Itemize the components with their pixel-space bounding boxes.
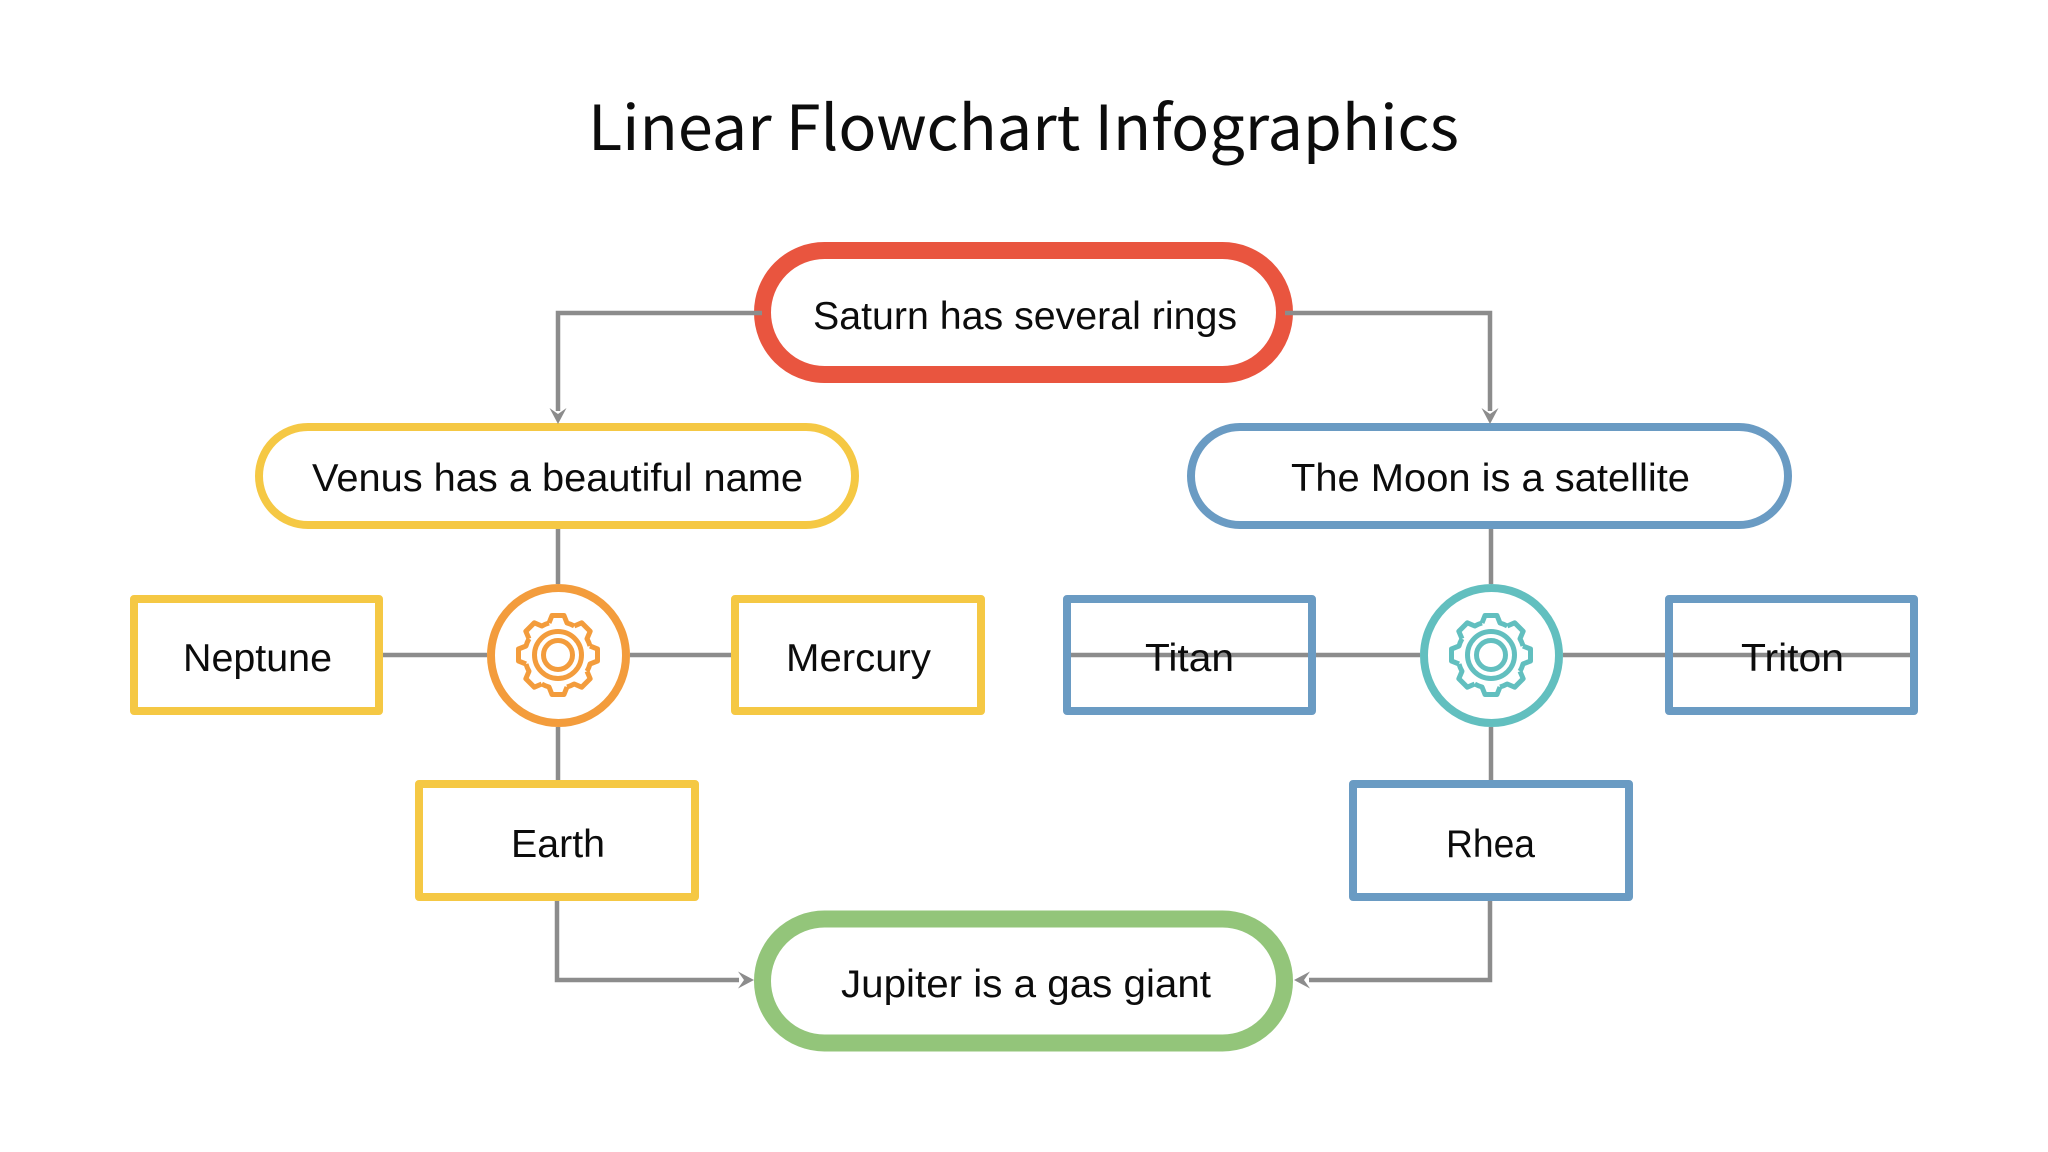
node: Triton box: [1669, 599, 1914, 711]
arrow: Rhea to Jupiter: [1294, 901, 1490, 988]
node: Saturn (top pill): Saturn has several rings: [813, 295, 1237, 338]
node: Earth box: [419, 784, 695, 897]
node: Titan box: Titan: [1145, 637, 1234, 680]
node: Neptune box: [134, 599, 379, 711]
node: Saturn (top pill): [762, 250, 1284, 374]
node: Triton box: Triton: [1741, 637, 1844, 680]
title: Linear Flowchart Infographics: [588, 78, 1459, 168]
connectors: left hub lines: [383, 529, 731, 780]
node: The Moon pill: The Moon is a satellite: [1291, 457, 1690, 500]
arrow: Earth to Jupiter: [557, 901, 754, 988]
node: Mercury box: [735, 599, 981, 711]
node: Rhea box: Rhea: [1446, 823, 1535, 866]
icon: orange gear hub: [491, 588, 626, 723]
node: Jupiter (bottom pill): Jupiter is a gas giant: [841, 963, 1211, 1006]
node: Rhea box: [1353, 784, 1629, 897]
node: Earth box: Earth: [511, 823, 605, 866]
arrow: Saturn to Moon: [1285, 313, 1498, 424]
node: Mercury box: Mercury: [786, 637, 932, 680]
node: Neptune box: Neptune: [183, 637, 332, 680]
node: Venus pill: Venus has a beautiful name: [312, 457, 803, 500]
connectors: right hub lines: [1316, 529, 1665, 780]
node: Jupiter (bottom pill): [762, 919, 1284, 1043]
node: Venus pill: [259, 427, 855, 525]
node: The Moon pill: [1191, 427, 1788, 525]
arrow: Saturn to Venus: [550, 313, 762, 424]
icon: teal gear hub: [1424, 588, 1559, 723]
node: Titan box: [1067, 599, 1312, 711]
